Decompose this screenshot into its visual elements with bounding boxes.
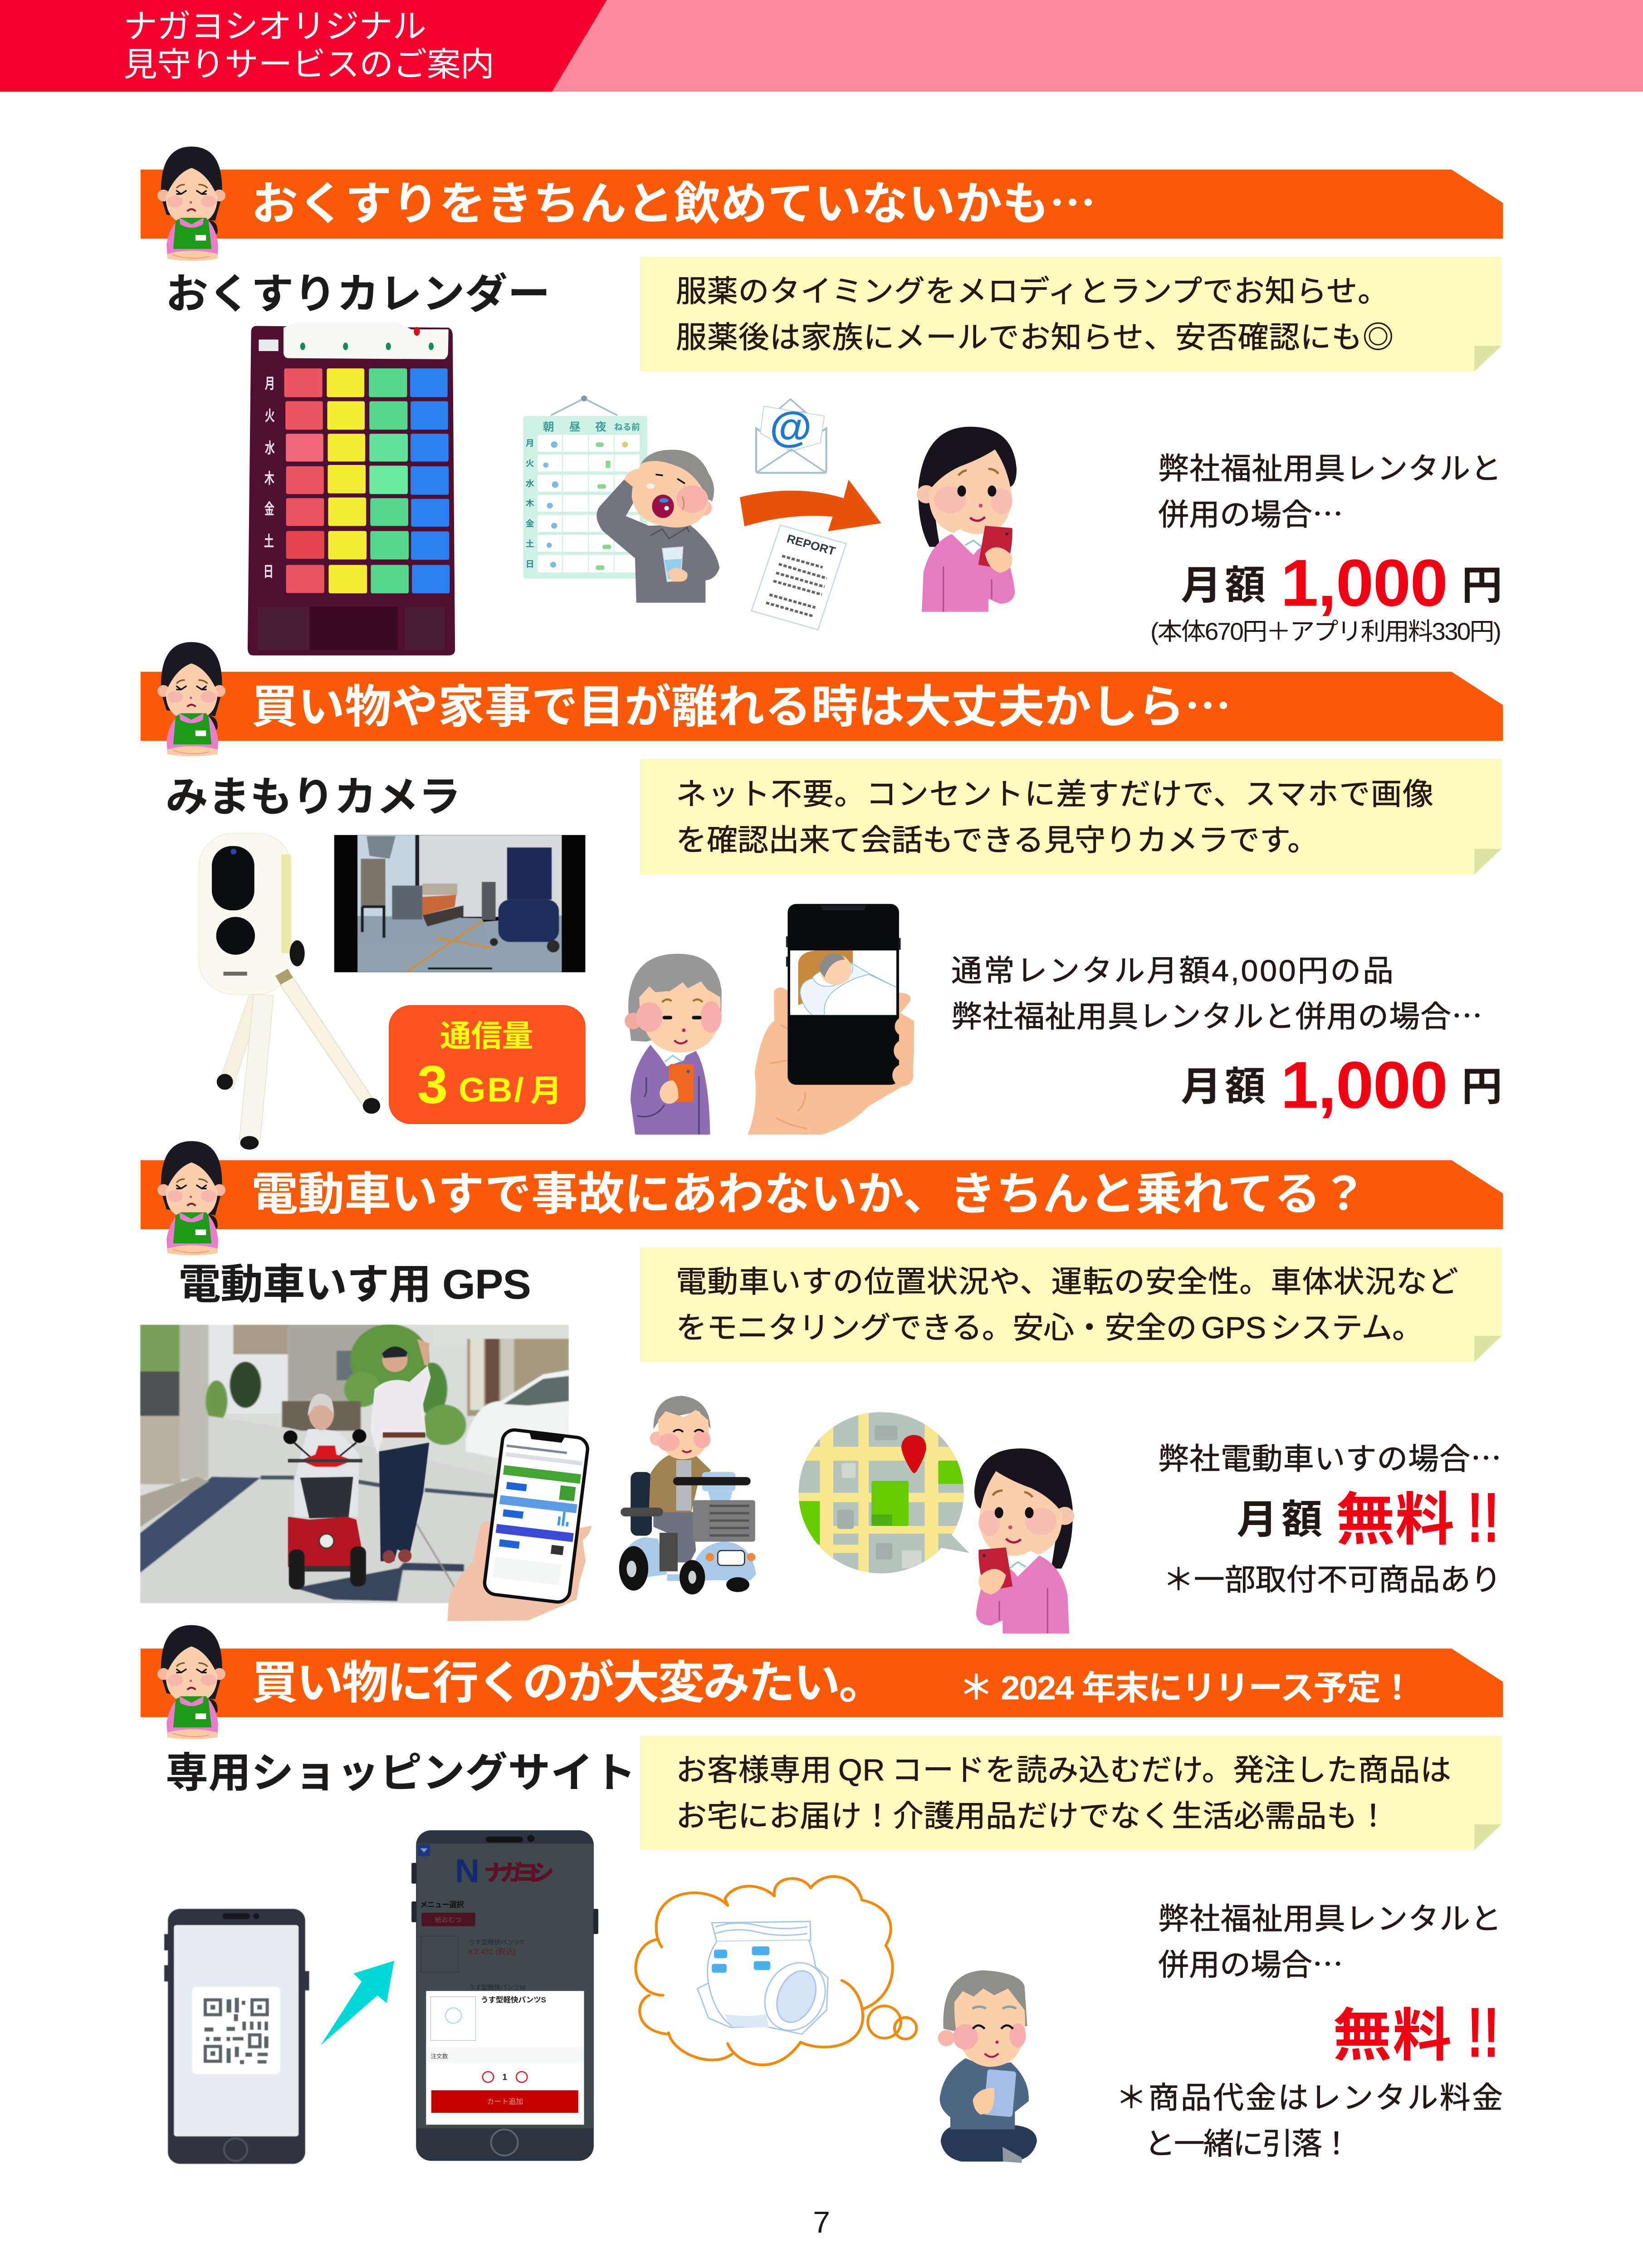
badge: data allowance: 3	[417, 1055, 448, 1114]
product name: monitoring camera: みまもりカメラ	[166, 773, 461, 820]
price block: GPS: 月額	[1237, 1497, 1322, 1542]
header band	[0, 0, 1643, 92]
icon: incontinence pants	[698, 1921, 836, 2040]
price block: shopping: ＊商品代金はレンタル料金	[1116, 2081, 1503, 2115]
price block: GPS: !!	[1467, 1478, 1499, 1557]
icon: phone with ordering site	[411, 1830, 598, 2161]
note: camera description: ネット不要。コンセントに差すだけで、スマホで画像	[676, 777, 1433, 811]
illustration: grandmother and phone view	[625, 904, 914, 1134]
icon: worried staff 1	[157, 147, 225, 261]
price block: medicine calendar: 月額	[1181, 563, 1266, 608]
badge: data allowance: 通信量	[440, 1019, 533, 1053]
price block: medicine calendar	[1150, 452, 1502, 645]
figure: man swallowing pill	[597, 450, 719, 603]
illustrations: scooter rider and map	[619, 1396, 973, 1594]
camera group	[199, 833, 585, 1149]
section 4 banner: 買い物に行くのが大変みたい。	[251, 1657, 885, 1708]
icon: email envelope	[756, 399, 826, 473]
GPS photo group	[140, 1324, 592, 1621]
icon: medicine chart: 夜	[595, 421, 606, 433]
price block: camera	[951, 954, 1502, 1122]
photo: medicine calendar pocket board: 金	[264, 501, 274, 517]
price block: GPS	[1158, 1435, 1501, 1597]
price block: camera: 1,000	[1281, 1048, 1448, 1122]
figure: woman on red scooter	[284, 1393, 367, 1589]
header title	[123, 8, 494, 83]
price block: shopping: 無料	[1333, 2004, 1452, 2068]
note: GPS description	[640, 1247, 1501, 1362]
figure: daughter checking phone	[917, 427, 1017, 612]
icon: phone with ordering site: 紙おむつ	[435, 1916, 462, 1924]
figure: hand holding phone with bed view	[748, 904, 914, 1134]
arrow: orange to family	[740, 479, 881, 531]
icon: phone with ordering site: ナガヨシ	[484, 1860, 554, 1886]
section 3 banner: 電動車いすで事故にあわないか、きちんと乗れてる？	[251, 1168, 1367, 1220]
icon: phone with QR code	[164, 1909, 309, 2164]
note: camera description	[640, 759, 1501, 875]
icon: phone with ordering site: 注文数	[430, 2053, 448, 2060]
photo: camera view of care room	[334, 835, 585, 972]
header title: 見守りサービスのご案内	[123, 46, 494, 83]
figure: man with phone sitting	[938, 1970, 1037, 2163]
icon: medicine chart: 火	[526, 459, 534, 468]
price block: GPS: ＊一部取付不可商品あり	[1163, 1563, 1501, 1597]
photo: medicine calendar pocket board: 火	[265, 408, 275, 424]
icon: map speech bubble	[790, 1411, 973, 1574]
icon: email envelope: @	[770, 403, 812, 450]
header title: ナガヨシオリジナル	[123, 8, 426, 45]
icon: report sheet: REPORT	[785, 532, 837, 558]
icon: medicine chart: 水	[526, 479, 534, 488]
phones and arrow group	[164, 1830, 598, 2164]
figure: grandmother with phone	[625, 954, 722, 1134]
photo: mobility scooter on street	[140, 1324, 569, 1603]
note: GPS description: 電動車いすの位置状況や、運転の安全性。車体状況など	[676, 1265, 1458, 1299]
icon: medicine chart: 土	[526, 539, 534, 549]
icon: worried staff 3	[157, 1141, 225, 1255]
icon: medicine chart: 金	[526, 519, 534, 528]
icon: worried staff 2	[157, 642, 225, 756]
icon: worried staff 4	[157, 1625, 225, 1739]
price block: camera: 通常レンタル月額4,000円の品	[951, 954, 1394, 988]
price block: shopping	[1116, 1902, 1503, 2161]
icon: phone with ordering site: うす型軽快パンツM	[469, 1984, 525, 1991]
badge: data allowance: GB/	[459, 1071, 524, 1109]
price block: GPS: 無料	[1336, 1488, 1454, 1552]
icon: phone with ordering site: 1	[502, 2072, 507, 2082]
price block: medicine calendar: 併用の場合…	[1158, 491, 1343, 534]
price block: shopping: 弊社福祉用具レンタルと	[1158, 1902, 1501, 1936]
photo: camera on tripod	[199, 833, 380, 1149]
note: camera description: を確認出来て会話もできる見守りカメラです。	[676, 824, 1318, 857]
figure: daughter tracking on phone	[974, 1448, 1074, 1633]
photo: medicine calendar pocket board: 水	[265, 440, 275, 456]
product name: medicine calendar: おくすりカレンダー	[166, 270, 550, 317]
price block: medicine calendar: 弊社福祉用具レンタルと	[1158, 452, 1501, 486]
price block: camera: 月額	[1181, 1064, 1266, 1109]
section 1 banner	[141, 167, 1503, 239]
figure: hand holding phone with app	[447, 1429, 592, 1621]
photo: medicine calendar pocket board: 日	[264, 563, 274, 580]
illustration: man taking medicine and report to family	[523, 396, 1017, 630]
page number: 7	[813, 2206, 830, 2239]
icon: phone with ordering site: カート追加	[487, 2097, 523, 2106]
photo: medicine calendar pocket board: 土	[264, 533, 274, 549]
note: shopping description	[640, 1736, 1501, 1850]
figure: man on mobility scooter	[619, 1396, 756, 1594]
icon: phone with ordering site: うす型軽快パンツS	[481, 1996, 546, 2004]
section 2 banner: 買い物や家事で目が離れる時は大丈夫かしら…	[251, 670, 1231, 736]
illustration: thought bubble and man	[636, 1877, 1037, 2163]
arrow: cyan pointing to site	[321, 1961, 394, 2045]
note: medicine calendar description: 服薬のタイミングをメロディとランプでお知らせ。	[676, 275, 1389, 308]
icon: medicine chart: 日	[526, 559, 534, 569]
photo: medicine calendar pocket board: 木	[264, 470, 274, 487]
badge: data allowance	[389, 1006, 585, 1124]
icon: medicine chart: 月	[526, 439, 534, 448]
note: medicine calendar description: 服薬後は家族にメールでお知らせ、安否確認にも◎	[676, 321, 1394, 354]
price block: shopping: 併用の場合…	[1158, 1941, 1343, 1984]
note: shopping description: お客様専用QRコードを読み込むだけ。発注した商品は	[676, 1754, 1451, 1787]
icon: phone with ordering site: N	[455, 1852, 479, 1889]
icon: phone with ordering site: ¥ 2,431 (税込)	[468, 1947, 516, 1956]
price block: medicine calendar: (本体670円＋アプリ利用料330円)	[1150, 618, 1501, 645]
icon: medicine chart: 木	[526, 499, 534, 508]
price block: medicine calendar: 円	[1462, 563, 1502, 608]
price block: camera: 弊社福祉用具レンタルと併用の場合…	[951, 992, 1482, 1036]
icon: medicine chart	[523, 396, 647, 578]
price block: camera: 円	[1462, 1064, 1502, 1109]
section 2 banner	[141, 670, 1503, 741]
price block: shopping: と一緒に引落！	[1144, 2127, 1352, 2161]
product name: shopping site: 専用ショッピングサイト	[166, 1750, 636, 1796]
icon: medicine chart: 昼	[569, 421, 581, 433]
section 4 banner	[141, 1648, 1503, 1717]
price block: medicine calendar: 1,000	[1281, 546, 1448, 620]
note: GPS description: をモニタリングできる。安心・安全のGPSシステム。	[676, 1311, 1423, 1345]
section 1 banner: おくすりをきちんと飲めていないかも…	[251, 167, 1096, 233]
icon: thought cloud	[636, 1877, 916, 2065]
icon: report sheet	[752, 525, 846, 630]
section 4 banner: ＊ 2024 年末にリリース予定！	[959, 1669, 1414, 1706]
icon: phone with ordering site: うす型軽快パンツS	[469, 1939, 524, 1946]
icon: medicine chart: ねる前	[614, 422, 640, 432]
note: shopping description: お宅にお届け！介護用品だけでなく生活必需品も！	[676, 1799, 1389, 1833]
figure: walking man	[371, 1339, 431, 1563]
photo: medicine calendar pocket board	[248, 323, 455, 655]
section 3 banner	[141, 1160, 1503, 1229]
icon: phone with ordering site: メニュー選択	[420, 1900, 464, 1909]
note: medicine calendar description	[640, 257, 1501, 371]
price block: GPS: 弊社電動車いすの場合…	[1158, 1435, 1501, 1478]
badge: data allowance: 月	[530, 1073, 562, 1108]
price block: shopping: !!	[1467, 1993, 1499, 2072]
icon: medicine chart: 朝	[543, 421, 554, 433]
product name: GPS: 電動車いす用 GPS	[178, 1261, 531, 1308]
photo: medicine calendar pocket board: 月	[265, 376, 275, 392]
